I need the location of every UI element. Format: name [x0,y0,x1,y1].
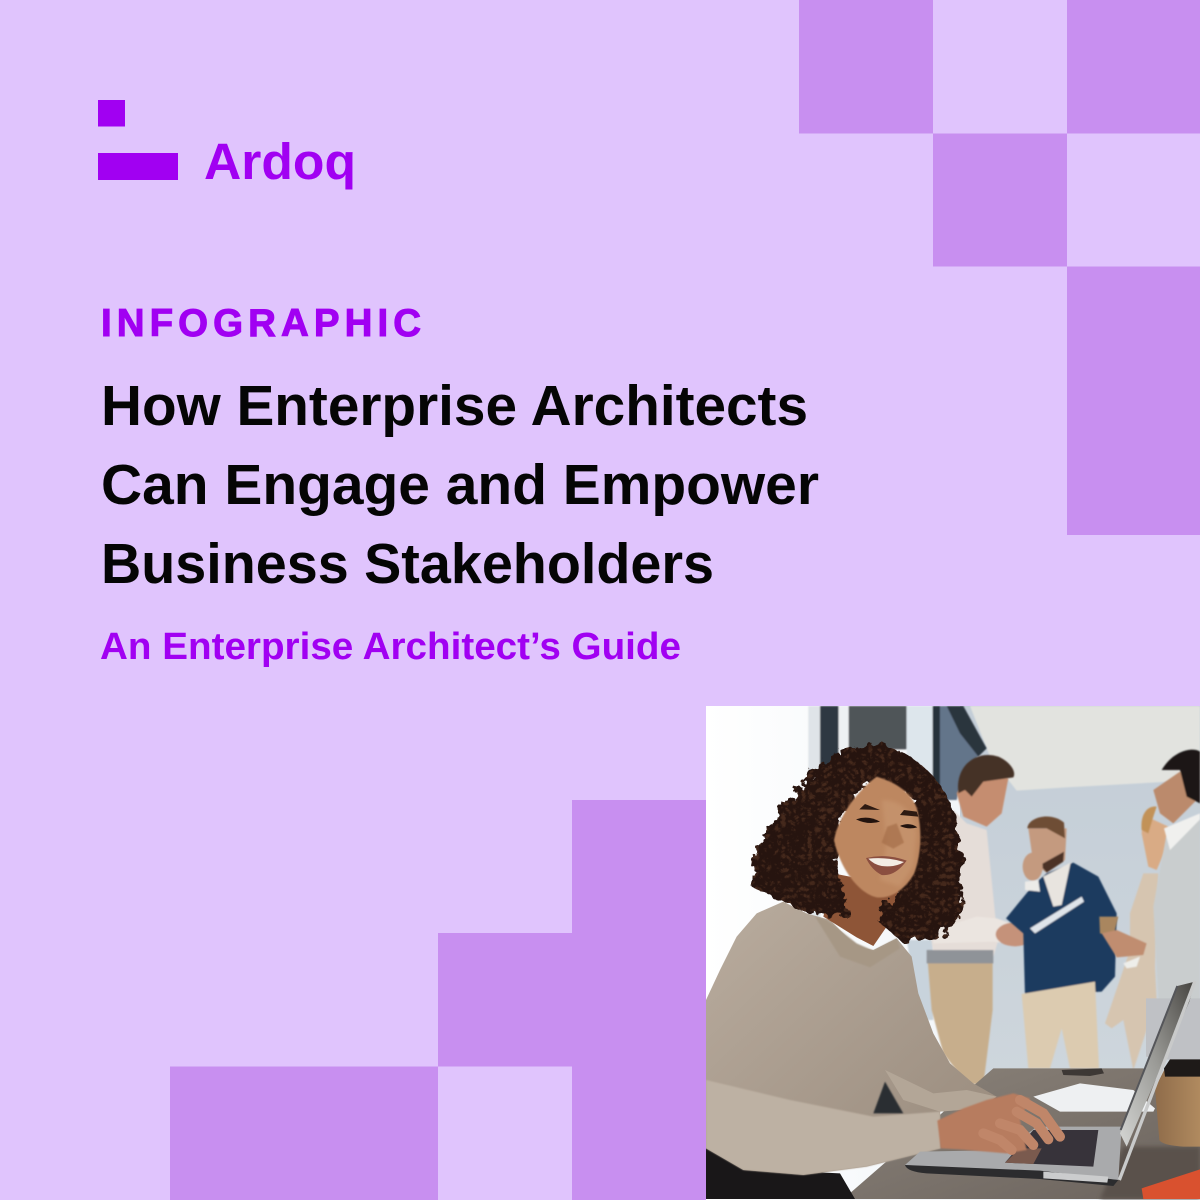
subtitle: An Enterprise Architect’s Guide [100,626,681,668]
woman hair [751,745,962,940]
title: How Enterprise Architects [101,374,808,437]
woman lower body [706,1143,855,1199]
photo: woman at laptop with colleagues behind [706,706,1200,1200]
decorative squares: top right [799,0,1200,535]
logo: Ardoq [98,100,356,190]
woman hands [937,1093,1060,1153]
title: Business Stakeholders [101,532,714,595]
background colleague 1 [927,755,1034,1085]
woman neck [823,873,900,946]
decorative squares: bottom [170,800,706,1200]
coffee cup [1155,1059,1200,1147]
title [101,374,819,595]
second laptop in background [1146,998,1200,1065]
background colleague 3 [1099,806,1168,1070]
room background [706,706,1200,1200]
logo wordmark: Ardoq [204,133,356,190]
red notebook [1142,1169,1200,1199]
woman sweater [706,902,997,1175]
background colleague 4 [1153,750,1200,1000]
table [843,1068,1200,1199]
woman face [834,777,920,897]
title: Can Engage and Empower [101,453,819,516]
eyebrow: INFOGRAPHIC: INFOGRAPHIC [101,302,421,345]
sweater collar [815,917,900,967]
papers on table [1033,1083,1155,1112]
background colleague 2 [1006,817,1117,1068]
logo mark [98,100,178,180]
laptop [905,981,1195,1186]
